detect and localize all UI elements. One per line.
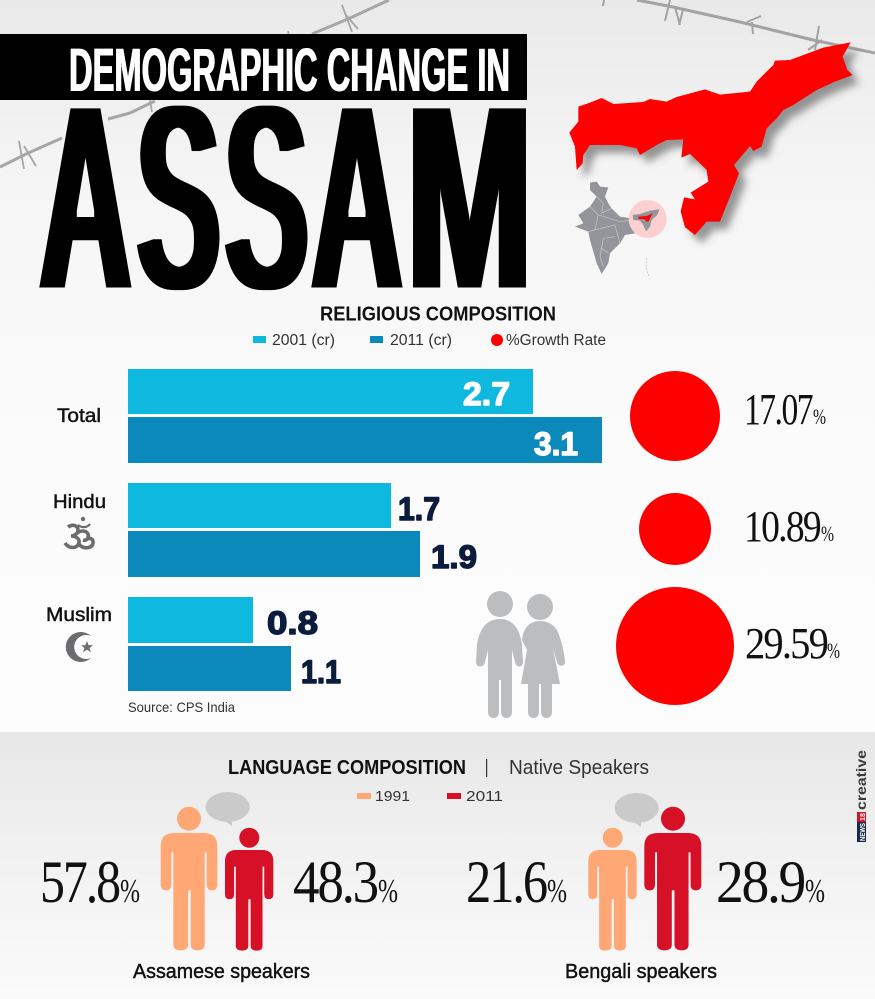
barbed wire left: [0, 0, 389, 169]
row: Total: Total: [57, 406, 101, 427]
panel: Bengali speakers: 28.9: [716, 849, 804, 915]
logo: News18 Creative: 18: [858, 813, 867, 821]
row: Muslim: 1.1: [301, 654, 341, 690]
logo: News18 Creative: [853, 750, 869, 842]
barbed wire right: [603, 0, 875, 53]
legend: religious composition: 2011 (cr): [390, 332, 452, 349]
title bar: [0, 34, 527, 104]
panel: Assamese speakers: 57.8: [40, 849, 119, 915]
row: Hindu: Hindu: [53, 492, 106, 513]
row: Hindu: 1.9: [431, 539, 477, 575]
row: Muslim: 0.8: [267, 605, 318, 641]
panel: Bengali speakers: %: [805, 873, 825, 910]
legend: religious composition: 2001 (cr): [272, 332, 335, 349]
panel: Assamese speakers: %: [120, 873, 140, 910]
growth circle: Total: [630, 371, 826, 461]
growth circle: Total: %: [813, 404, 826, 429]
panel: Bengali speakers: [466, 793, 825, 983]
title word: Assam: S: [136, 48, 220, 348]
panel: Assamese speakers: %: [378, 873, 398, 910]
icon: person 2011: [644, 807, 701, 950]
heading: language composition: [228, 757, 649, 779]
growth circle: Hindu: %: [821, 521, 834, 546]
legend: language composition: [357, 788, 503, 805]
map of Assam: [569, 42, 860, 243]
icon: crescent and star: [66, 632, 93, 662]
icon: person 2011: [225, 828, 273, 951]
icon: person 1991: [588, 828, 637, 951]
legend: language composition: 2011: [466, 788, 503, 805]
icon: speech bubble: [206, 792, 250, 826]
row: Hindu: [53, 483, 477, 577]
legend: language composition: 1991: [375, 788, 410, 805]
heading: language composition: LANGUAGE COMPOSITION: [228, 757, 466, 779]
row: Total: [57, 369, 602, 463]
row: Hindu: 1.7: [398, 491, 440, 527]
panel: Assamese speakers: 48.3: [293, 849, 377, 915]
legend: religious composition: [253, 332, 606, 349]
row: Total: 2.7: [463, 376, 510, 412]
icon: couple: [476, 591, 565, 718]
growth circle: Hindu: 10.89: [744, 502, 821, 551]
title word: Assam: S: [224, 48, 308, 348]
title word: Assam: A: [311, 48, 403, 348]
panel: Assamese speakers: Assamese speakers: [133, 961, 310, 983]
logo: News18 Creative: creative: [853, 750, 869, 810]
icon: person 1991: [161, 807, 217, 950]
legend: religious composition: %Growth Rate: [506, 332, 606, 349]
growth circle: Muslim: [616, 587, 840, 705]
growth circle: Muslim: %: [827, 638, 840, 663]
row: Muslim: Muslim: [46, 605, 112, 626]
panel: Bengali speakers: 21.6: [466, 849, 547, 915]
icon: speech bubble: [615, 793, 659, 827]
title word: Assam: M: [407, 48, 532, 348]
growth circle: Hindu: [639, 493, 834, 565]
logo: News18 Creative: NEWS: [858, 823, 867, 841]
map of India locator: [575, 182, 667, 278]
row: Total: 3.1: [534, 426, 578, 462]
growth circle: Muslim: 29.59: [745, 619, 828, 668]
growth circle: Total: 17.07: [744, 385, 813, 434]
row: Muslim: [46, 597, 341, 691]
title word: Assam: A: [39, 48, 132, 348]
panel: Bengali speakers: Bengali speakers: [565, 961, 717, 983]
panel: Assamese speakers: [40, 792, 398, 983]
icon: om symbol: [65, 518, 93, 548]
panel: Bengali speakers: %: [547, 873, 567, 910]
heading: religious composition: RELIGIOUS COMPOSITION: [320, 304, 556, 326]
title line: demographic change in: DEMOGRAPHIC CHANGE IN: [69, 36, 510, 104]
source note: Source: CPS India: [128, 699, 235, 715]
heading: language composition: Native Speakers: [509, 757, 649, 779]
